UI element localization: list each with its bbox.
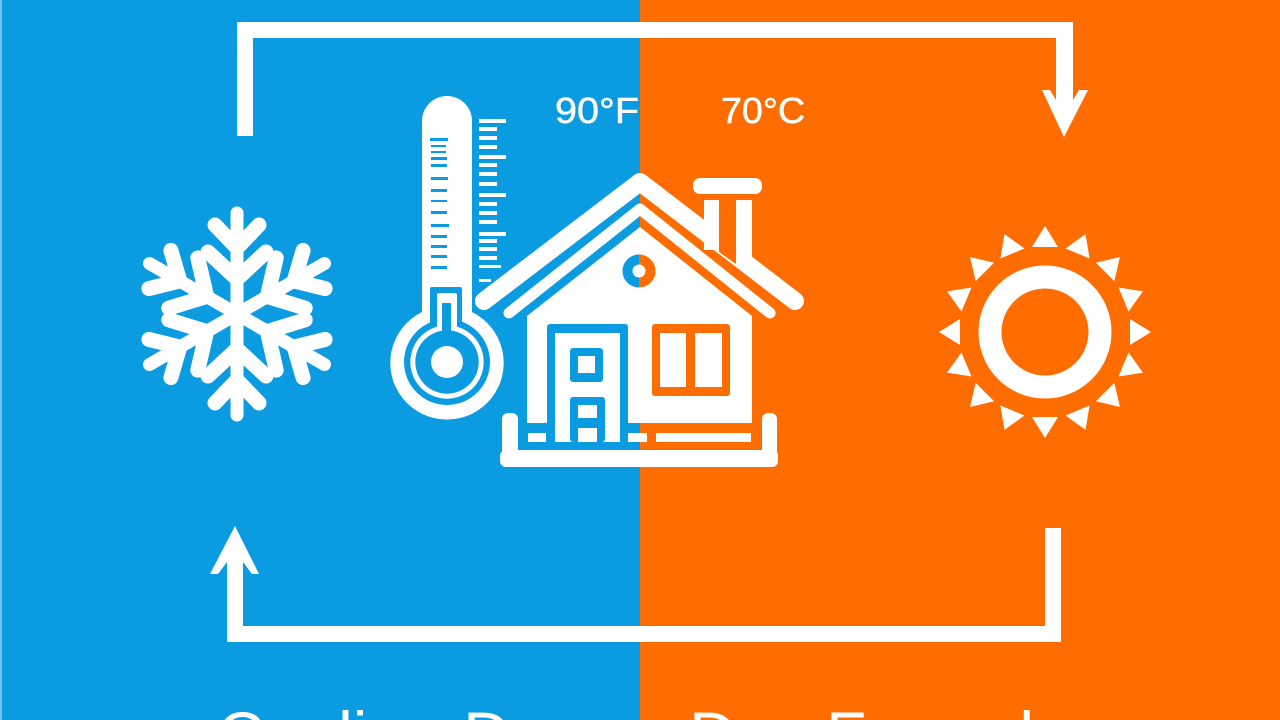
- outer roof: [484, 182, 795, 301]
- bulb rings: [404, 319, 490, 405]
- chimney flue channel: [719, 200, 736, 264]
- icon: snowflake: [135, 213, 339, 415]
- arrow: bottom loop from hot to cold: [210, 526, 1061, 642]
- house body: [527, 227, 752, 423]
- arrow: top loop from cold to hot: [237, 22, 1088, 137]
- window: [652, 324, 730, 396]
- panel: heating side background: [640, 0, 1280, 720]
- label: 90°F: 90°F: [555, 90, 639, 131]
- icon: house: [484, 178, 795, 467]
- attic round window: [628, 260, 650, 282]
- thermometer scale: [479, 119, 506, 282]
- panel: cooling side background: [0, 0, 640, 720]
- thermometer tube and bulb: [390, 96, 504, 420]
- foundation: [500, 413, 778, 467]
- chimney: [693, 178, 762, 266]
- door: [547, 324, 628, 444]
- tube markings: [430, 138, 449, 269]
- label: 70°C: 70°C: [721, 90, 805, 131]
- icon: sun: [939, 226, 1151, 438]
- icon: thermometer: [390, 96, 506, 420]
- inner roof: [509, 209, 770, 313]
